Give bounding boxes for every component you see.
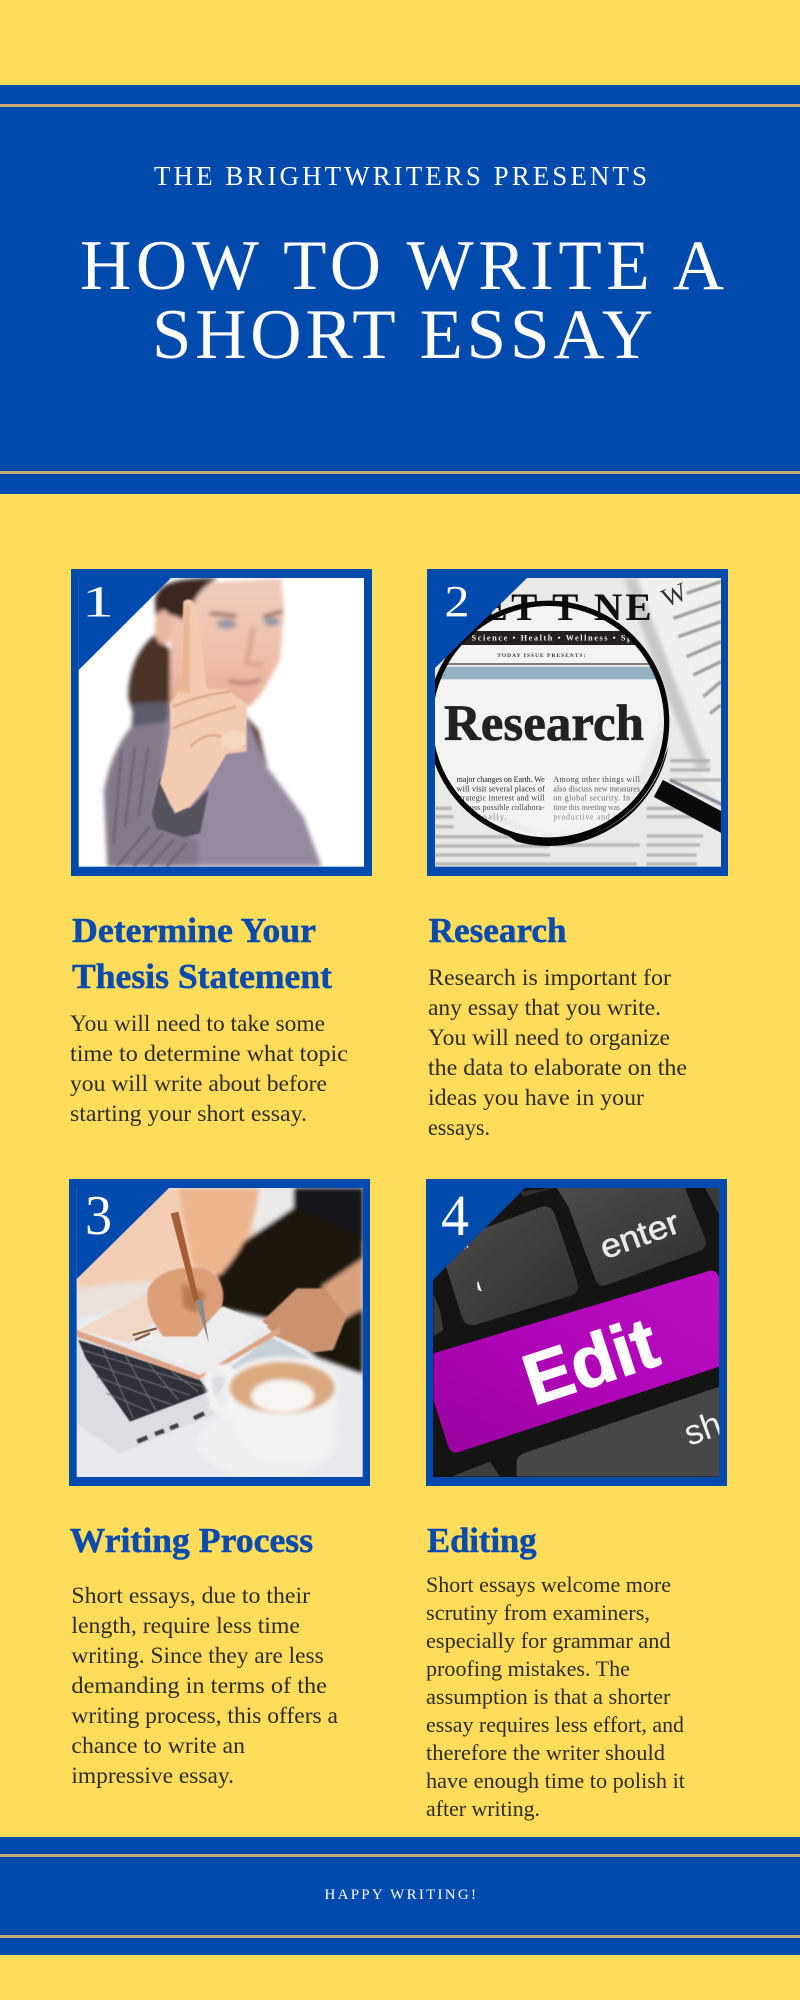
step 1 body text xyxy=(70,1011,348,1126)
photo: purple Edit key on keyboard: enter xyxy=(595,1204,684,1267)
footer text: HAPPY WRITING! xyxy=(324,1887,476,1903)
step 4 heading: Editing xyxy=(427,1521,537,1560)
photo: magnifying glass over newspaper: TODAY ISSUE PRESENTS: xyxy=(497,653,586,659)
photo: magnifying glass over newspaper xyxy=(430,577,727,864)
step 4 body text xyxy=(426,1572,685,1821)
number badge 4 xyxy=(433,1183,525,1280)
step 2 body text: the data to elaborate on the xyxy=(428,1055,687,1080)
header banner xyxy=(0,85,800,494)
photo: purple Edit key on keyboard xyxy=(433,1188,727,1477)
panel: step 1 image xyxy=(71,569,372,876)
photo: magnifying glass over newspaper: strategic interest and will xyxy=(457,794,545,803)
step 3 body text: writing process, this offers a xyxy=(71,1703,338,1728)
subtitle: THE BRIGHTWRITERS PRESENTS xyxy=(154,161,647,191)
number badge 2 xyxy=(435,577,527,668)
number badge 2: 2 xyxy=(444,577,470,626)
photo: magnifying glass over newspaper: will visit several places of xyxy=(457,784,545,793)
step 3 heading: Writing Process xyxy=(70,1521,313,1560)
step 3 body text xyxy=(71,1583,338,1788)
title: SHORT ESSAY xyxy=(152,296,653,374)
photo: magnifying glass over newspaper: also discuss new measures xyxy=(553,784,640,793)
step 4 body text: therefore the writer should xyxy=(426,1740,665,1765)
photo: magnifying glass over newspaper: discuss possible collabora- xyxy=(457,803,545,812)
photo: magnifying glass over newspaper: on global security. In xyxy=(553,794,630,803)
step 2 body text: You will need to organize xyxy=(428,1025,670,1050)
number badge 1 xyxy=(79,577,171,670)
photo: magnifying glass over newspaper: time this meeting was xyxy=(553,803,620,812)
photo: purple Edit key on keyboard: " xyxy=(461,1241,472,1258)
step 4 body text: proofing mistakes. The xyxy=(426,1656,630,1681)
step 1 heading xyxy=(72,911,332,996)
laptop body xyxy=(77,1337,230,1453)
step 3 body text: chance to write an xyxy=(71,1733,246,1758)
step 3 body text: length, require less time xyxy=(71,1613,300,1638)
step 2 body text: ideas you have in your xyxy=(428,1085,644,1110)
stripes on sleeve xyxy=(113,747,187,867)
photo: magnifying glass over newspaper: Research xyxy=(444,695,644,751)
step 3 body text: demanding in terms of the xyxy=(71,1673,327,1698)
title xyxy=(80,227,724,374)
step 2 body text xyxy=(428,965,687,1140)
photo: magnifying glass over newspaper: productive and in xyxy=(553,812,620,821)
number badge 1: 1 xyxy=(82,577,114,626)
silver wedge and table xyxy=(230,1337,310,1370)
footer banner xyxy=(0,1837,800,1955)
title: HOW TO WRITE A xyxy=(80,227,724,305)
photo: woman pointing finger xyxy=(104,578,322,867)
step 1 heading: Determine Your xyxy=(72,911,316,950)
step 4 body text: Short essays welcome more xyxy=(426,1572,671,1597)
step 3 body text: impressive essay. xyxy=(71,1763,234,1788)
step 1 body text: time to determine what topic xyxy=(70,1041,348,1066)
step 3 body text: writing. Since they are less xyxy=(71,1643,324,1668)
step 4 body text: essay requires less effort, and xyxy=(426,1712,684,1737)
panel: step 4 image xyxy=(426,1179,727,1486)
step 2 body text: any essay that you write. xyxy=(428,995,661,1020)
photo: writing in notebook beside laptop and coffee xyxy=(77,1188,363,1477)
photo: magnifying glass over newspaper: s • Science • Health • Wellness • Sp xyxy=(455,633,632,642)
step 1 body text: you will write about before xyxy=(70,1071,327,1096)
step 4 body text: scrutiny from examiners, xyxy=(426,1600,650,1625)
panel: step 3 image xyxy=(69,1179,370,1486)
step 4 body text: after writing. xyxy=(426,1796,540,1821)
photo: purple Edit key on keyboard: sh xyxy=(679,1404,727,1454)
photo: magnifying glass over newspaper: To tionally. xyxy=(457,812,507,821)
step 2 body text: essays. xyxy=(428,1115,490,1140)
number badge 3: 3 xyxy=(85,1185,112,1247)
panel: step 2 image xyxy=(427,569,728,876)
step 1 body text: starting your short essay. xyxy=(70,1101,307,1126)
step 2 body text: Research is important for xyxy=(428,965,671,990)
photo: magnifying glass over newspaper: Among other things will xyxy=(553,775,641,784)
notebook xyxy=(78,1293,157,1343)
photo: magnifying glass over newspaper: major changes on Earth. We xyxy=(457,775,545,784)
step 3 body text: Short essays, due to their xyxy=(71,1583,310,1608)
number badge 4: 4 xyxy=(441,1183,469,1248)
masthead letters: ET T NE xyxy=(482,585,652,629)
step 4 body text: assumption is that a shorter xyxy=(426,1684,671,1709)
step 2 heading: Research xyxy=(429,911,567,950)
number badge 3 xyxy=(77,1185,169,1279)
step 1 heading: Thesis Statement xyxy=(72,957,332,996)
photo: magnifying glass over newspaper: W xyxy=(657,577,691,613)
step 4 body text: have enough time to polish it xyxy=(426,1768,685,1793)
step 1 body text: You will need to take some xyxy=(70,1011,325,1036)
step 4 body text: especially for grammar and xyxy=(426,1628,670,1653)
photo: purple Edit key on keyboard: Edit xyxy=(514,1303,668,1421)
